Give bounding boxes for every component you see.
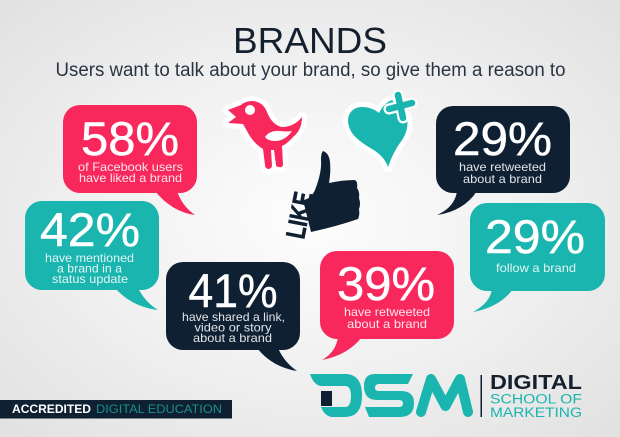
bubble: 42% mentioned a brand	[25, 201, 159, 310]
bubble: 58% liked a brand: of Facebook users	[78, 160, 183, 174]
title: BRANDS	[233, 20, 387, 61]
bubble: 29% retweeted: 29%	[453, 112, 552, 165]
logo wordmark: DIGITAL	[490, 372, 582, 394]
bubble: 29% follow	[470, 203, 605, 312]
bubble: 42% mentioned a brand: have mentioned	[45, 251, 134, 265]
logo divider	[480, 375, 482, 417]
icon: thumbs up with LIKE	[280, 151, 360, 241]
bar: accredited digital education: DIGITAL EDUCATION	[96, 404, 222, 416]
bar: accredited digital education: ACCREDITED	[12, 404, 91, 416]
bubble: 39% retweeted: 39%	[337, 257, 435, 310]
bubble: 42% mentioned a brand: status update	[52, 272, 128, 286]
icon: heart with plus	[348, 95, 412, 167]
logo wordmark: SCHOOL OF	[490, 392, 582, 406]
icon: bird	[228, 101, 302, 169]
bubble: 41% shared a link	[166, 262, 300, 371]
bubble: 29% follow: 29%	[485, 210, 585, 263]
bar: accredited digital education	[0, 400, 232, 418]
bubble: 58% liked a brand	[63, 105, 197, 215]
bubble: 39% retweeted	[320, 251, 454, 360]
bubble: 58% liked a brand: 58%	[81, 112, 179, 165]
bubble: 42% mentioned a brand: 42%	[40, 203, 140, 256]
bubble: 29% retweeted: have retweeted	[459, 160, 546, 174]
bubble: 29% follow: follow a brand	[496, 261, 576, 275]
bubble: 42% mentioned a brand: a brand in a	[57, 262, 122, 276]
bubble: 39% retweeted: about a brand	[347, 317, 427, 331]
logo wordmark: MARKETING	[490, 405, 582, 420]
subtitle: Users want to talk about your brand, so give them a reason to	[56, 60, 566, 81]
LIKE label: LIKE	[280, 189, 319, 241]
logo wordmark	[490, 372, 582, 420]
bubble: 29% retweeted: about a brand	[463, 172, 542, 186]
bubble: 41% shared a link: have shared a link,	[182, 310, 285, 324]
logo mark: DSM	[310, 374, 468, 417]
bubble: 41% shared a link: video or story	[194, 320, 272, 334]
bubble: 41% shared a link: 41%	[188, 264, 278, 317]
bubble: 29% retweeted	[436, 106, 570, 215]
logo: DSM Digital School of Marketing	[310, 372, 582, 420]
bubble: 39% retweeted: have retweeted	[344, 305, 430, 319]
bubble: 58% liked a brand: have liked a brand	[79, 171, 182, 185]
bubble: 41% shared a link: about a brand	[193, 331, 272, 345]
